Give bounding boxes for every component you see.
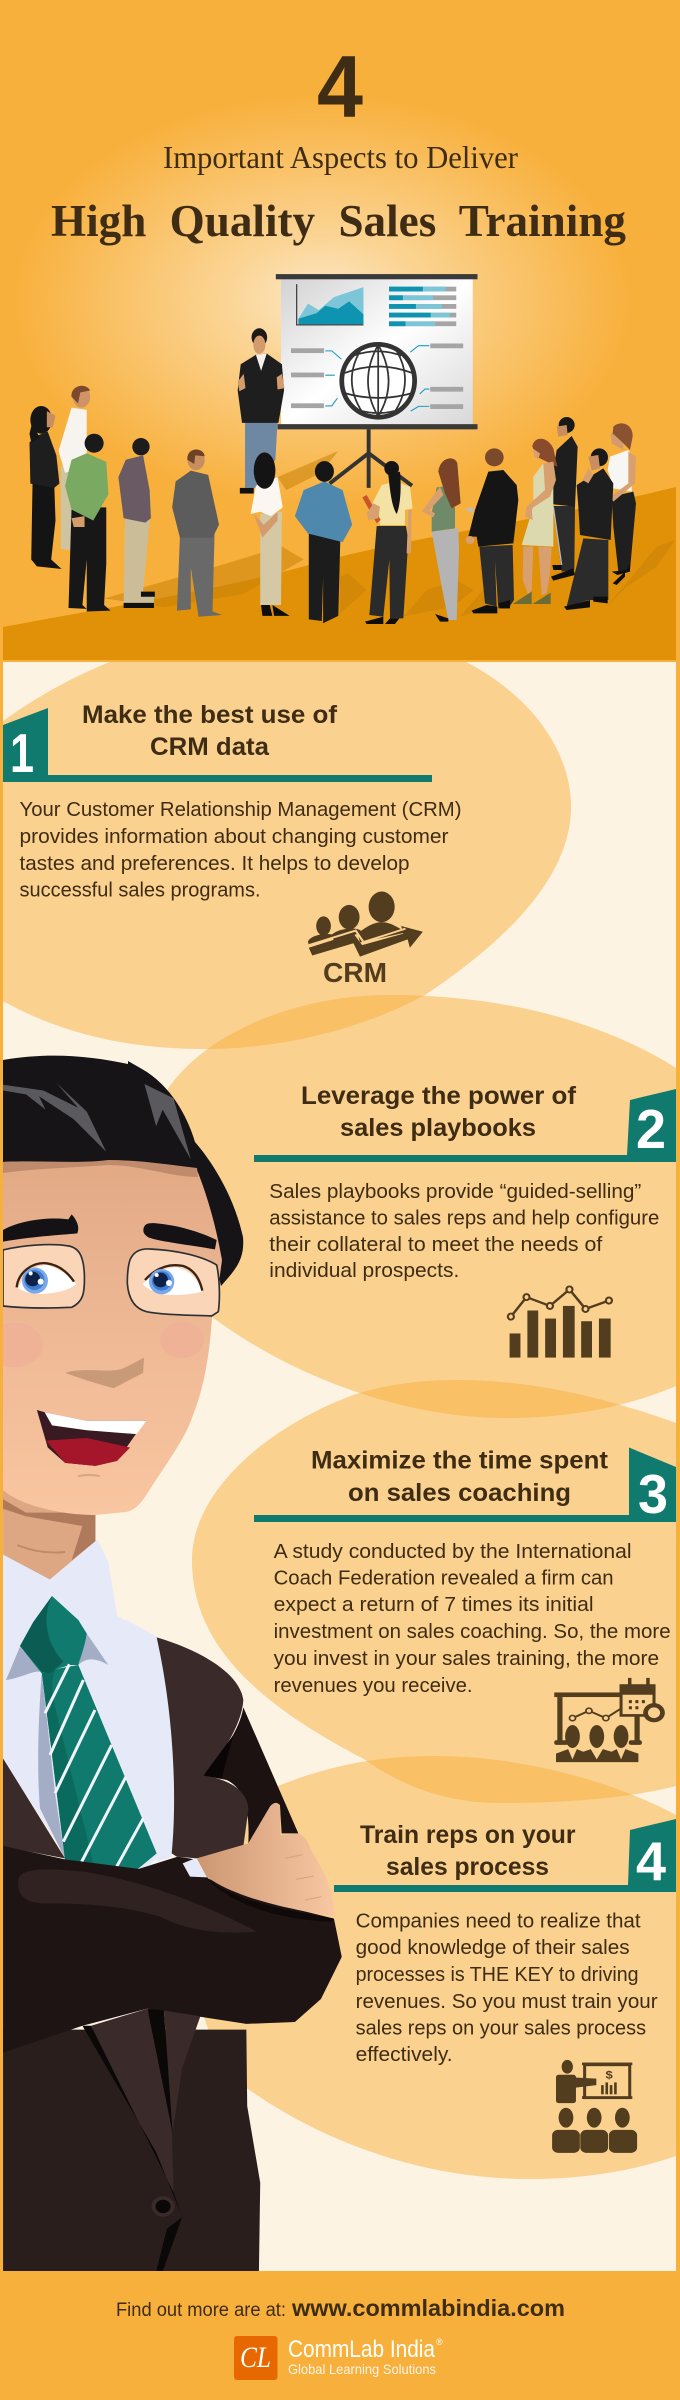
ellipse background 2 [144,995,676,1418]
body text 3: A study conducted by the International [274,1540,632,1563]
arm highlight, cuff and hand [18,1803,335,1933]
businessman illustration [0,1056,342,2271]
body text 2: Sales playbooks provide “guided-selling” [269,1180,641,1203]
cream content background [0,662,680,2272]
CommLab India logo: Global Learning Solutions [288,2361,436,2377]
jacket left lapel [3,1758,65,1858]
presentation board [276,274,478,488]
hairline shadow [3,1160,198,1177]
person: man in green sweater [65,434,111,612]
illustration: presentation scene [29,274,675,624]
body text 2: their collateral to meet the needs of [269,1233,603,1256]
body text 4: processes is THE KEY to driving [356,1963,639,1986]
icon: CRM [308,892,423,988]
number badge 2 [254,1089,676,1162]
icon: coaching session [554,1678,665,1762]
panel: step 1 [3,701,462,988]
heading 2: sales playbooks [340,1114,536,1142]
footer link text: www.commlabindia.com [291,2295,565,2321]
subtitle: Important Aspects to Deliver [163,139,518,175]
icon: trainer with audience: $ [605,2068,613,2081]
right ground shadows [340,540,675,617]
main title: High Quality Sales Training [51,196,626,246]
body text 4: effectively. [356,2043,453,2066]
heading 4: Train reps on your [360,1821,576,1849]
body text 3: revenues you receive. [274,1674,473,1697]
body text 1: tastes and preferences. It helps to develop [20,852,410,875]
number badge 3: 3 [638,1463,668,1525]
body text 3: Coach Federation revealed a firm can [274,1566,614,1590]
ground shadows [104,451,338,607]
CommLab India logo: CommLab India [288,2336,436,2363]
person: man in blue shirt [295,461,352,623]
body text 1: Your Customer Relationship Management (CRM) [20,798,462,821]
panel: step 2 [254,1082,676,1358]
heading 3: on sales coaching [348,1479,571,1507]
ellipse background 1 [3,662,571,1049]
heading 3: Maximize the time spent [311,1446,609,1474]
torso: shirt, tie and jacket [3,1596,298,1870]
ellipse background 3 [192,1380,676,1803]
person: woman in white top [608,423,636,585]
number badge 4: 4 [636,1830,666,1892]
person: woman in green top [422,458,461,622]
footer link text: Find out more are at: [116,2300,286,2321]
heading 4: sales process [386,1853,549,1881]
person: woman in olive dress [513,439,557,604]
blush [0,1322,204,1367]
person: woman in white blouse [251,452,290,616]
person: woman in yellow top [362,461,413,624]
jacket right lapel [157,1637,248,1858]
body text 1: provides information about changing customer [20,825,449,848]
presenter [238,328,285,494]
header background [0,0,680,662]
hair [3,1056,243,1286]
icon: bar chart with trend line [508,1286,612,1358]
heading 2: Leverage the power of [301,1082,577,1110]
person: man in dark suit far right [549,417,578,581]
face [3,1162,222,1515]
nose and mouth [37,1358,147,1476]
CommLab India logo [234,2336,443,2380]
jacket sleeve [203,1707,298,1843]
tie [20,1596,157,1870]
heading 1: Make the best use of [82,701,338,729]
number badge 3 [254,1448,676,1525]
title number: 4 [317,37,363,136]
body text 2: individual prospects. [269,1259,459,1282]
body text 3: investment on sales coaching. So, the more [274,1620,671,1643]
number badge 2: 2 [636,1098,666,1160]
neck [3,1490,95,1581]
number badge 1: 1 [10,722,34,784]
person: man in grey suit [172,449,222,617]
shirt upper [3,1539,176,1796]
folded arms and body [3,1846,342,2271]
body text 4: sales reps on your sales process [356,2017,646,2040]
body text 4: Companies need to realize that [356,1910,641,1932]
eyes and glasses [3,1214,219,1316]
CommLab India logo: CL [240,2341,271,2374]
body text 2: assistance to sales reps and help configure [269,1206,659,1230]
body text 3: expect a return of 7 times its initial [274,1593,594,1616]
ellipse background 4 [196,1756,676,2179]
person: man in purple shirt [118,438,155,608]
number badge 4 [334,1819,676,1892]
ground [3,487,676,660]
person: man in black suit [465,448,518,613]
body text 1: successful sales programs. [20,878,260,902]
body text 4: revenues. So you must train your [356,1990,658,2013]
person: man in white shirt [59,386,90,551]
number badge 1 [3,708,432,784]
body text 3: you invest in your sales training, the more [274,1647,659,1670]
heading 1: CRM data [150,733,270,761]
CommLab India logo: ® [436,2337,443,2347]
person: man with hand on chin [564,448,613,610]
icon: trainer with audience [552,2060,637,2153]
panel: step 3 [254,1446,676,1762]
icon: CRM: CRM [323,957,387,988]
panel: step 4 [334,1819,676,2153]
footer background [0,2271,680,2400]
person: woman in black suit [29,406,62,569]
body text 4: good knowledge of their sales [356,1936,630,1959]
